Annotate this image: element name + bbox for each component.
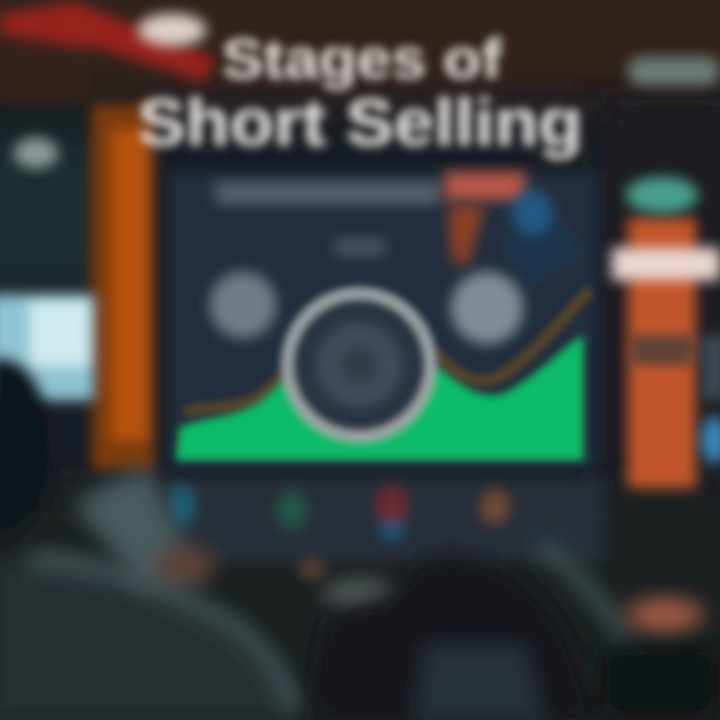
row of small icons beneath screen <box>165 478 605 579</box>
title: Stages of <box>222 27 502 90</box>
orange column left <box>92 105 154 470</box>
right banner <box>612 177 720 488</box>
brown line trace <box>185 290 590 412</box>
screen panel <box>168 172 598 468</box>
coloured accents top right <box>448 190 585 285</box>
bright window left <box>0 295 94 400</box>
right circle <box>451 272 523 344</box>
central ring <box>287 293 431 437</box>
red ceiling beam <box>0 2 215 100</box>
small label <box>335 238 385 256</box>
ceiling lights <box>14 14 720 168</box>
left circle <box>210 272 276 338</box>
screen header bar <box>215 172 525 204</box>
title: Short Selling <box>138 85 582 159</box>
peach highlight lower right <box>627 599 703 631</box>
dark audience silhouettes <box>310 545 720 720</box>
person at left foreground <box>0 359 396 720</box>
title <box>138 27 582 159</box>
green area chart <box>177 335 583 460</box>
